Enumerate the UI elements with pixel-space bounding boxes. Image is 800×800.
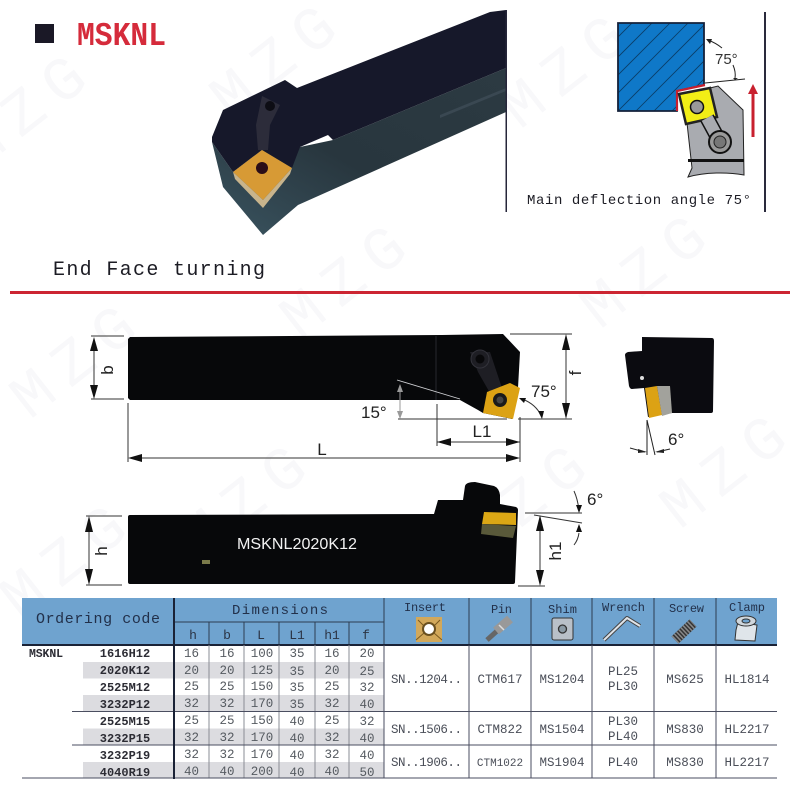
cutting diagram: 75° [715,51,738,68]
row 3232P12: 32 [184,697,199,711]
row 4040R19: 40 [219,765,235,779]
row 2525M12: 2525M12 [100,681,150,695]
table header band: L [257,628,265,643]
watermark: MZG [168,424,333,575]
accessories group 1906: MS1904 [539,756,585,770]
table header band: b [223,628,231,643]
row 3232P12: 40 [359,698,375,712]
side view drawing: MSKNL2020K12 [237,536,357,553]
table header band: Wrench [602,601,645,615]
accessories group 1506: SN..1506.. [391,723,462,737]
row 3232P19: 32 [324,748,340,762]
dimension L [128,403,520,462]
dimension L1 [437,404,520,446]
row 3232P19: 32 [184,748,199,762]
row 1616H12: 16 [219,647,235,661]
table header band: Insert [404,601,446,615]
table header band: Ordering code [36,611,160,628]
row 2525M15: 2525M15 [100,715,150,729]
right rule [764,12,766,212]
accessories group 1204: PL30 [608,680,638,694]
angle 6 side: 6° [587,490,603,509]
accessories group 1506: MS830 [666,723,704,737]
accessories group 1204: MS1204 [539,673,585,687]
watermark: MZG [268,204,433,355]
dimension h: h [92,546,111,556]
dimension f: f [566,370,585,375]
row 3232P19: 170 [251,748,273,762]
row 3232P12: 35 [289,698,305,712]
accessories group 1204: HL1814 [724,673,770,687]
row 2525M15: 25 [219,714,235,728]
row 3232P19 [100,748,375,763]
angle 6 side [525,490,603,545]
row 3232P15: 40 [359,732,375,746]
table header band [22,598,777,646]
row 3232P12 [100,697,375,712]
row 3232P19: 40 [289,749,305,763]
accessories group 1204: CTM617 [477,673,523,687]
dimension h1 [518,515,565,586]
row 2020K12: 25 [359,665,375,679]
row 1616H12: 20 [359,647,375,661]
watermark: MZG [568,194,733,345]
angle 15: 15° [361,403,387,422]
heading: end face turning: End Face turning [53,259,265,282]
row 3232P19: 40 [359,749,375,763]
icon: wrench [604,618,640,640]
accessories group 1506 [391,715,770,744]
series label: MSKNL [29,648,63,661]
row 2525M12 [100,680,375,695]
row 3232P12: 32 [324,697,340,711]
accessories group 1506: MS1504 [539,723,585,737]
row 2020K12: 20 [324,664,340,678]
row 2525M12: 25 [219,680,235,694]
cutting diagram [617,22,758,178]
row 3232P15: 170 [251,731,273,745]
row 1616H12: 100 [251,647,273,661]
row 3232P15: 3232P15 [100,732,150,746]
table header band: Shim [548,603,577,617]
accessories group 1204: MS625 [666,673,704,687]
row 2020K12: 2020K12 [100,664,150,678]
dimension b [90,336,124,399]
icon: insert [416,617,442,642]
table header band: Screw [669,602,705,616]
row 2020K12: 125 [251,664,273,678]
dimension L1: L1 [473,422,491,441]
icon: pin [487,619,510,640]
row 4040R19: 40 [184,765,199,779]
row 1616H12: 16 [324,647,340,661]
end view drawing [625,337,714,455]
row 3232P15: 40 [289,732,305,746]
row 1616H12 [100,647,375,661]
row 3232P15 [100,731,375,746]
accessories group 1204: SN..1204.. [391,673,462,687]
grey row bands [83,662,384,778]
dimension h1: h1 [546,542,565,560]
accessories group 1906 [391,756,770,770]
accessories group 1906: CTM1022 [477,758,523,770]
angle 15 [361,384,507,422]
specification table [22,598,777,780]
caption: main deflection angle: Main deflection angle 75° [527,193,751,209]
side view drawing [128,482,518,584]
title: MSKNL [77,18,166,55]
watermark: MZG [448,424,613,575]
watermark [0,0,800,635]
row 4040R19: 4040R19 [100,766,150,780]
table header band: Pin [491,603,512,617]
table header band: h [189,628,197,643]
dimension f [510,334,585,419]
accessories group 1906: SN..1906.. [391,756,462,770]
icon: shim [552,618,573,640]
row 3232P12: 3232P12 [100,698,150,712]
accessories group 1906: HL2217 [724,756,770,770]
row 1616H12: 1616H12 [100,647,150,661]
row 2525M12: 32 [359,681,375,695]
row 2525M12: 25 [184,680,199,694]
row 1616H12: 35 [289,647,305,661]
row 2020K12 [100,664,375,679]
accessories group 1204 [391,665,770,694]
title marker square [35,24,54,43]
accessories group 1506: PL40 [608,730,638,744]
row 4040R19: 40 [324,765,340,779]
row 4040R19: 40 [289,766,305,780]
icon: clamp [735,616,757,641]
row 4040R19: 200 [251,765,273,779]
dimension b: b [98,365,117,375]
row 3232P12: 32 [219,697,235,711]
row 2525M12: 35 [289,681,305,695]
accessories group 1506: HL2217 [724,723,770,737]
row 3232P12: 170 [251,697,273,711]
row 3232P19: 3232P19 [100,749,150,763]
row 2525M15: 40 [289,715,305,729]
row 3232P15: 32 [324,731,340,745]
accessories group 1506: CTM822 [477,723,523,737]
accessories group 1204: PL25 [608,665,638,679]
row 2020K12: 20 [184,664,199,678]
row 2525M15: 32 [359,715,375,729]
red divider [10,291,790,294]
row 2525M15: 150 [251,714,273,728]
table header band: Dimensions [232,603,328,619]
watermark: MZG [0,284,163,435]
row 4040R19 [100,765,375,780]
angle 75: 75° [531,382,557,401]
angle 75 [519,382,557,419]
photo edge rule [506,10,507,212]
row 2525M12: 25 [324,680,340,694]
table header band: L1 [289,628,305,643]
table header band: f [362,628,370,643]
accessories group 1906: MS830 [666,756,704,770]
accessories group 1906: PL40 [608,756,638,770]
row 2525M15 [100,714,375,729]
dimension L: L [317,440,327,459]
table grid [22,645,777,778]
table header band: h1 [324,628,340,643]
row 3232P15: 32 [184,731,199,745]
end view drawing: 6° [668,430,684,449]
dimension h [85,516,122,585]
accessories group 1506: PL30 [608,715,638,729]
top view drawing [128,334,520,419]
row 1616H12: 16 [184,647,199,661]
row 2525M15: 25 [324,714,340,728]
row 2020K12: 20 [219,664,235,678]
row 2525M15: 25 [184,714,199,728]
row 2525M12: 150 [251,680,273,694]
row 3232P19: 32 [219,748,235,762]
table header band: Clamp [729,601,765,615]
tool photo [212,10,506,235]
row 3232P15: 32 [219,731,235,745]
row 2020K12: 35 [289,665,305,679]
row 4040R19: 50 [359,766,375,780]
icon: screw [675,623,693,640]
